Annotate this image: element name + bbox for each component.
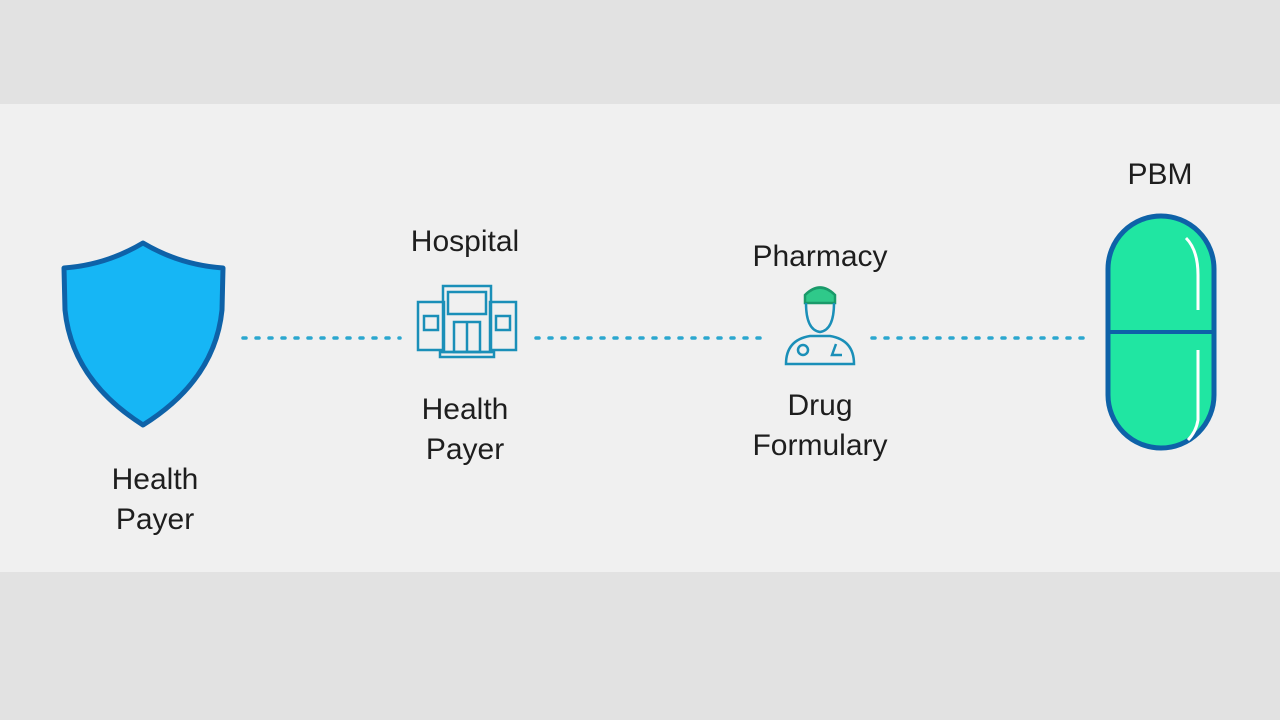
icon: pharmacist: [786, 288, 854, 364]
icon: shield: [64, 243, 223, 425]
icon: hospital: [418, 286, 516, 357]
content band: [0, 104, 1280, 572]
icon: pill: [1108, 216, 1214, 448]
label: Health Payer (hospital): Health: [422, 393, 508, 426]
label: Drug Formulary: Formulary: [752, 429, 888, 462]
label: Health Payer (shield): Health: [112, 463, 198, 496]
label: Health Payer (hospital): [422, 393, 508, 466]
label: Pharmacy: Pharmacy: [752, 240, 888, 273]
dotted connector 1: [243, 336, 400, 340]
label: Health Payer (hospital): Payer: [426, 433, 504, 466]
label: Drug Formulary: Drug: [787, 389, 853, 422]
label: Health Payer (shield): Payer: [116, 503, 194, 536]
label: PBM: PBM: [1127, 158, 1192, 191]
label: Health Payer (shield): [112, 463, 198, 536]
dotted connector 2: [536, 336, 764, 340]
label: Drug Formulary: [752, 389, 888, 462]
label: Hospital: Hospital: [411, 225, 519, 258]
dotted connector 3: [872, 336, 1088, 340]
